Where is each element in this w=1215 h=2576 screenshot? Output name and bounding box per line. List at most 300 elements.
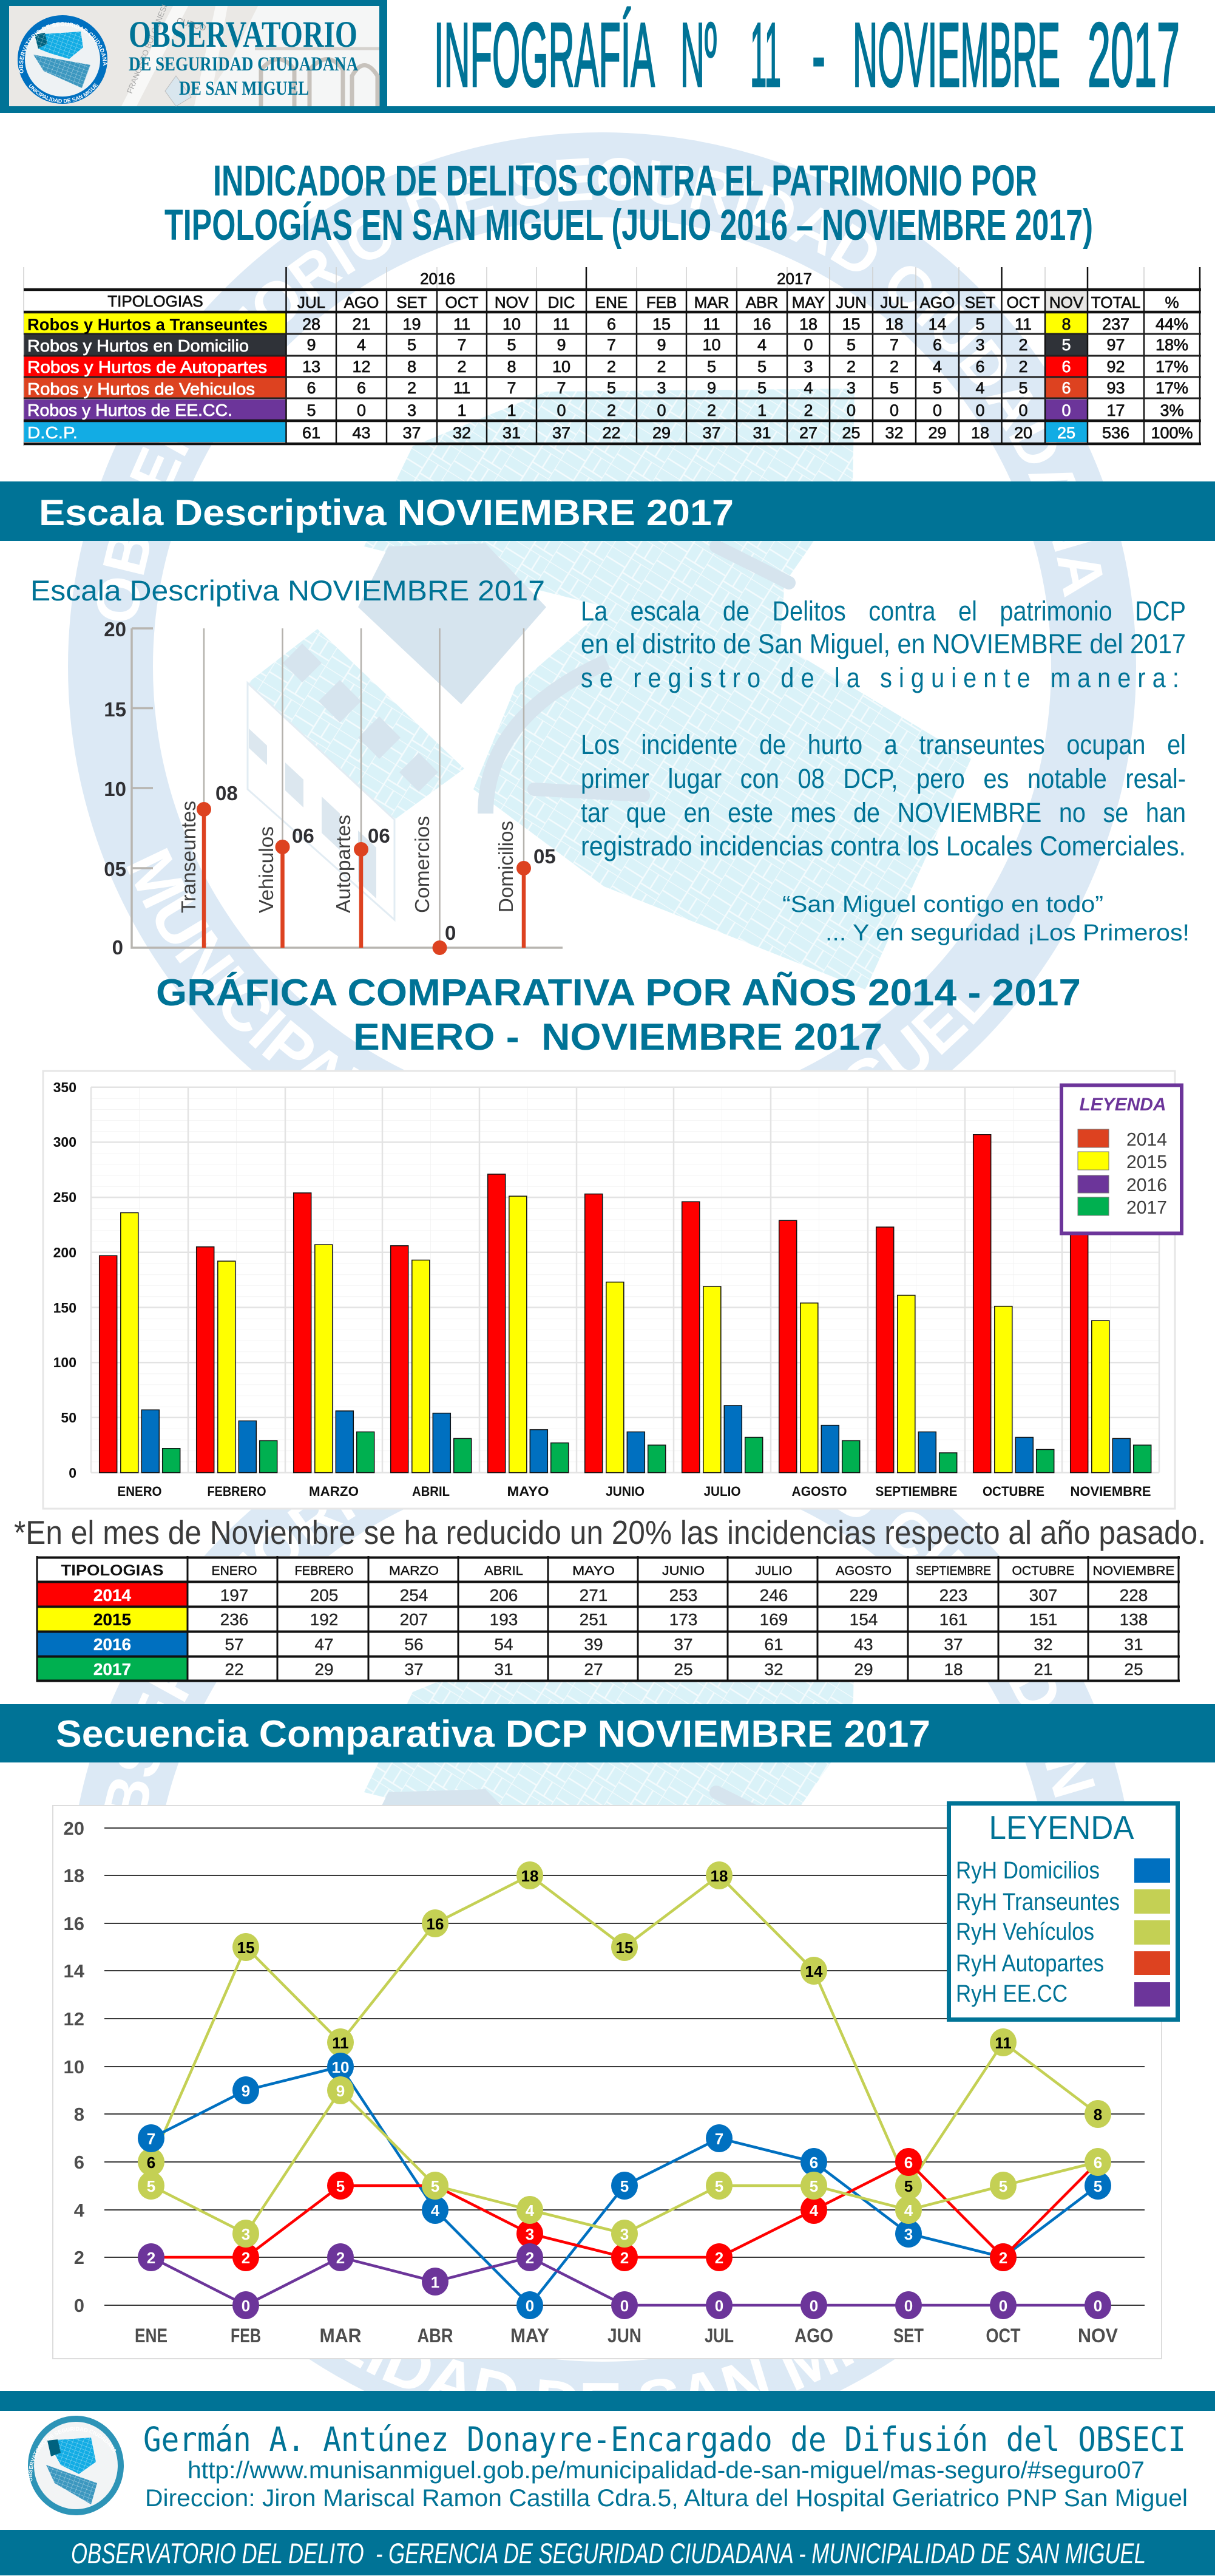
row: transeuntes values: 10 xyxy=(503,315,521,333)
row: domicilio values: 9 xyxy=(557,336,566,354)
column headers: NOVIEMBRE xyxy=(1092,1564,1175,1578)
series: vehiculos xyxy=(138,2076,1111,2248)
row: domicilio values: 3 xyxy=(975,336,985,354)
row 2016: 37 xyxy=(944,1635,963,1654)
bottom bar: credits xyxy=(0,2530,1215,2575)
axis labels: 10 xyxy=(104,778,126,800)
row: d.c.p. totals: 37 xyxy=(402,424,421,442)
row: vehiculos values: 5 xyxy=(1018,379,1028,397)
x axis labels: MAY xyxy=(510,2325,549,2347)
row: d.c.p. totals: 29 xyxy=(652,424,671,442)
section bar: escala descriptiva xyxy=(0,481,1215,541)
heading: grafica comparativa: GRÁFICA COMPARATIVA POR AÑOS 2014 - 2017 xyxy=(156,972,1081,1014)
y axis labels: 0 xyxy=(74,2295,84,2316)
month labels xyxy=(118,1484,1151,1499)
row: autopartes values: 8 xyxy=(407,358,416,376)
legend: series: RyH EE.CC xyxy=(956,1980,1068,2007)
column headers: OCT xyxy=(445,293,479,311)
axis labels: 20 xyxy=(104,618,126,641)
series: domicilios: 5 xyxy=(1094,2177,1102,2195)
x axis labels: OCT xyxy=(986,2325,1021,2347)
month labels: MAYO xyxy=(507,1484,549,1499)
series: ee.cc xyxy=(138,2243,1111,2319)
month labels: JUNIO xyxy=(606,1484,645,1499)
row: domicilio values: 0 xyxy=(804,336,813,354)
x axis labels: ABR xyxy=(418,2325,453,2347)
row: ee.cc values: 0 xyxy=(975,401,985,420)
row: autopartes values: 2 xyxy=(890,358,899,376)
row: transeuntes values: 8 xyxy=(1061,315,1071,333)
column headers: OCTUBRE xyxy=(1012,1564,1074,1578)
watermark: lower seal: OBSERVATORIO DE SEGURIDAD CIUDADANA xyxy=(104,1509,1095,1805)
column headers: AGOSTO xyxy=(836,1564,892,1578)
row 2015: 207 xyxy=(400,1610,428,1629)
series: transeuntes: 14 xyxy=(805,1962,823,1980)
logo wordmark: DE SAN MIGUEL xyxy=(179,78,309,100)
series: domicilios: 5 xyxy=(620,2177,629,2195)
row labels: Robos y Hurtos en Domicilio xyxy=(27,336,249,355)
section bar: secuencia comparativa: Secuencia Comparativa DCP NOVIEMBRE 2017 xyxy=(56,1713,930,1755)
row: d.c.p. totals: 27 xyxy=(799,424,817,442)
series: domicilios: 7 xyxy=(147,2130,155,2148)
row 2016: 43 xyxy=(854,1635,873,1654)
row: transeuntes values: 19 xyxy=(402,315,421,333)
row: ee.cc values: 0 xyxy=(1018,401,1028,420)
row 2016: 54 xyxy=(494,1635,513,1654)
watermark: upper seal: OBSERVATORIO DE SEGURIDAD CIUDADANA xyxy=(97,158,1103,620)
series: ee.cc: 1 xyxy=(431,2273,439,2291)
series: autopartes: 2 xyxy=(242,2249,250,2267)
row 2017: 25 xyxy=(1124,1660,1143,1679)
series: autopartes: 3 xyxy=(526,2225,534,2243)
row: ee.cc values: 17 xyxy=(1106,401,1125,420)
footer xyxy=(0,2391,1215,2575)
row: vehiculos values: 11 xyxy=(453,379,470,397)
row: transeuntes values: 14 xyxy=(928,315,947,333)
row: d.c.p. totals: 31 xyxy=(753,424,771,442)
row: autopartes values: 5 xyxy=(757,358,767,376)
axis labels: 05 xyxy=(104,858,126,880)
section bar: secuencia comparativa xyxy=(0,1704,1215,1762)
row 2015: 192 xyxy=(310,1610,338,1629)
row: domicilio values: 7 xyxy=(457,336,467,354)
y axis labels: 16 xyxy=(64,1913,84,1934)
row: vehiculos values: 5 xyxy=(933,379,942,397)
y axis labels: 14 xyxy=(64,1960,85,1982)
y axis labels: 300 xyxy=(53,1134,76,1150)
watermark: lower seal xyxy=(79,1509,1125,2391)
column headers xyxy=(61,1562,1175,1579)
logo wordmark: DE SEGURIDAD CIUDADANA xyxy=(129,53,358,75)
text: contact: Direccion: Jiron Mariscal Ramon Castilla Cdra.5, Altura del Hospital Geriatrico PNP San Miguel xyxy=(145,2485,1188,2512)
series: ee.cc: 0 xyxy=(242,2297,250,2315)
y axis labels: 200 xyxy=(53,1245,76,1260)
row: ee.cc values: 0 xyxy=(890,401,899,420)
row 2015: 161 xyxy=(939,1610,967,1629)
series: autopartes: 6 xyxy=(904,2153,913,2172)
title: infografia number: 11 xyxy=(750,4,781,106)
bars 2016 xyxy=(141,1405,1130,1473)
column headers: FEB xyxy=(646,293,677,311)
row: vehiculos values: 5 xyxy=(607,379,616,397)
row: vehiculos values: 93 xyxy=(1106,379,1125,397)
column headers: AGO xyxy=(344,293,379,311)
row: domicilio values: 7 xyxy=(607,336,616,354)
row: ee.cc values: 0 xyxy=(357,401,366,420)
row: ee.cc values: 2 xyxy=(707,401,716,420)
row: domicilio values: 18% xyxy=(1156,336,1188,354)
legend: series: RyH Transeuntes xyxy=(956,1889,1120,1915)
x axis labels: JUL xyxy=(705,2325,734,2347)
row: ee.cc values: 3 xyxy=(407,401,416,420)
row: vehiculos values: 4 xyxy=(804,379,813,397)
column headers: SET xyxy=(396,293,427,311)
y axis labels: 100 xyxy=(53,1354,76,1370)
row: vehiculos values: 7 xyxy=(557,379,566,397)
row: autopartes values: 2 xyxy=(607,358,616,376)
row: vehiculos values: 4 xyxy=(975,379,985,397)
row: ee.cc values: 0 xyxy=(847,401,856,420)
series: vehiculos: 4 xyxy=(904,2201,913,2220)
column headers: DIC xyxy=(548,293,575,311)
row: transeuntes values: 11 xyxy=(703,315,720,333)
bars 2017 xyxy=(163,1432,1151,1473)
row 2016: 57 xyxy=(225,1635,244,1654)
column headers: % xyxy=(1165,293,1179,311)
series: vehiculos: 4 xyxy=(526,2201,535,2220)
row 2015: 154 xyxy=(850,1610,878,1629)
row 2016: 32 xyxy=(1034,1635,1053,1654)
row: ee.cc values: 0 xyxy=(1061,401,1071,420)
item: domicilios: Domicilios xyxy=(495,821,517,912)
title: infografia number: - xyxy=(812,4,825,106)
row 2016: 61 xyxy=(764,1635,783,1654)
series: autopartes: 2 xyxy=(999,2249,1007,2267)
series: domicilios: 4 xyxy=(431,2201,440,2220)
series: transeuntes: 16 xyxy=(427,1915,444,1933)
x axis labels: NOV xyxy=(1078,2325,1119,2347)
row labels: Robos y Hurtos de Vehiculos xyxy=(27,379,255,398)
item: domicilios xyxy=(495,821,556,948)
row 2014: 206 xyxy=(490,1586,518,1605)
panel: observatorio logo box xyxy=(0,0,387,107)
series: vehiculos: 5 xyxy=(810,2177,818,2195)
row 2014: 223 xyxy=(939,1586,967,1605)
text block: slogan xyxy=(782,892,1190,946)
x axis labels: AGO xyxy=(794,2325,833,2347)
series: domicilios: 6 xyxy=(810,2153,818,2172)
month labels: OCTUBRE xyxy=(983,1484,1044,1499)
y axis labels: 350 xyxy=(53,1079,76,1095)
series: transeuntes xyxy=(138,1861,1111,2200)
x axis labels xyxy=(135,2325,1119,2347)
chart heading: Escala Descriptiva NOVIEMBRE 2017 xyxy=(30,574,545,607)
month labels: ABRIL xyxy=(412,1484,450,1499)
row: domicilio values: 4 xyxy=(757,336,767,354)
table: tipologias by month 2016-2017 xyxy=(24,267,1201,446)
series: ee.cc: 0 xyxy=(810,2297,818,2315)
row: vehiculos values: 6 xyxy=(1061,379,1071,397)
text block: explanation xyxy=(581,596,1186,861)
row: d.c.p. totals: 25 xyxy=(842,424,861,442)
row: d.c.p. totals: 29 xyxy=(928,424,947,442)
row: autopartes values: 12 xyxy=(352,358,371,376)
row: domicilio values: 9 xyxy=(657,336,666,354)
row: domicilio values: 5 xyxy=(407,336,416,354)
row: transeuntes values: 237 xyxy=(1102,315,1129,333)
row: autopartes values: 2 xyxy=(457,358,467,376)
row: autopartes values: 2 xyxy=(657,358,666,376)
series: domicilios: 10 xyxy=(332,2058,349,2076)
column headers: NOV xyxy=(1049,293,1084,311)
row: autopartes values: 6 xyxy=(975,358,985,376)
row 2017: 21 xyxy=(1034,1660,1053,1679)
month labels: AGOSTO xyxy=(791,1484,847,1499)
row: domicilio values: 97 xyxy=(1106,336,1125,354)
series: vehiculos: 3 xyxy=(620,2225,629,2243)
row: autopartes values: 5 xyxy=(707,358,716,376)
y axis labels xyxy=(53,1079,76,1481)
month labels: NOVIEMBRE xyxy=(1071,1484,1151,1499)
row 2015: 151 xyxy=(1029,1610,1057,1629)
text: contact xyxy=(143,2420,1188,2512)
row: ee.cc values: 2 xyxy=(804,401,813,420)
row 2017: 27 xyxy=(584,1660,603,1679)
legend: series: RyH Autopartes xyxy=(956,1950,1104,1977)
row: transeuntes values: 18 xyxy=(799,315,817,333)
row 2015: 236 xyxy=(220,1610,248,1629)
row: d.c.p. totals: 32 xyxy=(453,424,471,442)
y axis labels: 150 xyxy=(53,1300,76,1316)
item: comercios xyxy=(411,816,456,955)
row: domicilio values: 10 xyxy=(702,336,721,354)
x axis labels: JUN xyxy=(608,2325,641,2347)
row: transeuntes values: 44% xyxy=(1156,315,1188,333)
item: transeuntes: Transeuntes xyxy=(177,801,200,913)
y axis labels: 250 xyxy=(53,1189,76,1205)
item: comercios: 0 xyxy=(445,922,456,944)
series: vehiculos: 3 xyxy=(242,2225,250,2243)
column headers: JUL xyxy=(297,293,325,311)
table: yearly comparison xyxy=(36,1556,1180,1682)
year labels xyxy=(420,270,812,288)
axes and stems xyxy=(132,628,563,948)
column headers: JUNIO xyxy=(662,1564,705,1578)
row 2014: 246 xyxy=(760,1586,788,1605)
row: autopartes values: 2 xyxy=(1018,358,1028,376)
row 2014: 253 xyxy=(669,1586,697,1605)
row 2015: 138 xyxy=(1120,1610,1148,1629)
series: transeuntes: 18 xyxy=(521,1867,538,1885)
series: transeuntes: 11 xyxy=(332,2034,349,2052)
y axis labels: 20 xyxy=(64,1818,84,1839)
row: d.c.p. totals: 22 xyxy=(602,424,621,442)
series: ee.cc: 0 xyxy=(999,2297,1007,2315)
row: domicilio values: 7 xyxy=(890,336,899,354)
item: comercios: Comercios xyxy=(411,816,433,913)
series: autopartes: 4 xyxy=(810,2201,819,2220)
y axis labels: 10 xyxy=(64,2056,84,2078)
x axis labels: SET xyxy=(893,2325,924,2347)
row: ee.cc values: 1 xyxy=(457,401,467,420)
series: domicilios xyxy=(138,2053,1111,2319)
row 2014: 254 xyxy=(400,1586,428,1605)
series: domicilios: 7 xyxy=(715,2130,723,2148)
row: ee.cc values: 0 xyxy=(657,401,666,420)
row: transeuntes values: 5 xyxy=(975,315,985,333)
row: domicilio values: 5 xyxy=(507,336,516,354)
series: autopartes: 5 xyxy=(336,2177,345,2195)
row: vehiculos values: 5 xyxy=(757,379,767,397)
series: transeuntes: 5 xyxy=(904,2177,913,2195)
row 2015: 169 xyxy=(760,1610,788,1629)
category colour cells xyxy=(24,313,1087,442)
row: vehiculos values: 17% xyxy=(1156,379,1188,397)
row: vehiculos values: 3 xyxy=(847,379,856,397)
row labels: D.C.P. xyxy=(27,423,78,442)
icon: seal logo: OBSERVATORIO DE SEGURIDAD CIUDADANA xyxy=(19,22,107,73)
header band xyxy=(0,0,1215,113)
row 2016: 39 xyxy=(584,1635,603,1654)
row: ee.cc values: 1 xyxy=(757,401,767,420)
series: ee.cc: 0 xyxy=(620,2297,629,2315)
row: d.c.p. totals: 61 xyxy=(302,424,320,442)
text: contact: http://www.munisanmiguel.gob.pe/municipalidad-de-san-miguel/mas-seguro/#seguro07 xyxy=(188,2457,1145,2484)
lollipop chart: escala descriptiva xyxy=(104,618,563,959)
x axis labels: ENE xyxy=(135,2325,168,2347)
month labels: JULIO xyxy=(704,1484,740,1499)
row 2014: 205 xyxy=(310,1586,338,1605)
row 2014: 229 xyxy=(850,1586,878,1605)
y axis labels: 2 xyxy=(74,2247,84,2268)
section bar: escala descriptiva: Escala Descriptiva NOVIEMBRE 2017 xyxy=(39,492,734,533)
series: autopartes: 2 xyxy=(715,2249,723,2267)
row labels: Robos y Hurtos a Transeuntes xyxy=(27,315,268,334)
row: domicilio values: 6 xyxy=(933,336,942,354)
series: transeuntes: 15 xyxy=(616,1939,633,1957)
year labels: 2016 xyxy=(420,270,455,288)
row: d.c.p. totals: 32 xyxy=(885,424,904,442)
panel: line chart xyxy=(53,1803,1177,2359)
row 2017: 2017 xyxy=(93,1660,131,1679)
series: autopartes: 2 xyxy=(620,2249,629,2267)
y axis labels: 6 xyxy=(74,2152,84,2173)
row 2015: 193 xyxy=(490,1610,518,1629)
series: vehiculos: 9 xyxy=(336,2082,345,2100)
item: domicilios: 05 xyxy=(533,845,556,868)
row: transeuntes values: 21 xyxy=(352,315,371,333)
row labels: Robos y Hurtos de Autopartes xyxy=(27,358,267,376)
row: domicilio values: 4 xyxy=(357,336,366,354)
row: ee.cc values: 0 xyxy=(933,401,942,420)
column headers: TOTAL xyxy=(1091,293,1140,311)
column headers: ABRIL xyxy=(484,1564,523,1578)
panel: observatorio logo box: CUZCO xyxy=(175,15,208,33)
row 2016: 37 xyxy=(674,1635,693,1654)
legend: years: 2015 xyxy=(1126,1151,1167,1172)
series: transeuntes: 8 xyxy=(1094,2105,1102,2124)
series: autopartes xyxy=(151,2148,1098,2271)
row 2014: 228 xyxy=(1120,1586,1148,1605)
row: autopartes values: 4 xyxy=(933,358,942,376)
row 2017: 29 xyxy=(314,1660,334,1679)
row: autopartes values: 2 xyxy=(847,358,856,376)
row 2017: 29 xyxy=(854,1660,873,1679)
row: domicilio values: 5 xyxy=(847,336,856,354)
row: transeuntes values: 11 xyxy=(553,315,570,333)
row: autopartes values: 6 xyxy=(1061,358,1071,376)
column headers: TIPOLOGIAS xyxy=(107,292,203,310)
series: ee.cc: 0 xyxy=(1094,2297,1102,2315)
item: vehiculos xyxy=(255,824,314,948)
row 2017: 31 xyxy=(494,1660,513,1679)
column headers: TIPOLOGIAS xyxy=(61,1562,164,1579)
row: autopartes values: 3 xyxy=(804,358,813,376)
month labels: MARZO xyxy=(309,1484,359,1499)
series: ee.cc: 2 xyxy=(336,2249,345,2267)
month labels: ENERO xyxy=(118,1484,161,1499)
row: d.c.p. totals: 536 xyxy=(1102,424,1129,442)
watermark: lower seal: MUNICIPALIDAD DE SAN MIGUEL xyxy=(345,2359,855,2391)
month labels: FEBRERO xyxy=(208,1484,266,1499)
bars 2015 xyxy=(121,1196,1109,1473)
row: domicilio values: 2 xyxy=(1018,336,1028,354)
series: vehiculos: 6 xyxy=(1094,2153,1102,2172)
logo wordmark: OBSERVATORIO xyxy=(129,15,357,55)
series: ee.cc: 0 xyxy=(904,2297,913,2315)
row: vehiculos values: 6 xyxy=(357,379,366,397)
x axis labels: MAR xyxy=(319,2325,362,2347)
axis labels: 0 xyxy=(112,936,123,959)
row: transeuntes values: 15 xyxy=(842,315,861,333)
row 2015: 251 xyxy=(580,1610,608,1629)
row 2015: 2015 xyxy=(93,1610,131,1629)
title: infografia number: INFOGRAFÍA xyxy=(434,4,655,106)
heading: indicador de delitos xyxy=(164,157,1093,250)
icon: footer seal xyxy=(28,2416,124,2515)
y axis labels: 8 xyxy=(74,2104,84,2125)
text block: slogan: ... Y en seguridad ¡Los Primeros! xyxy=(825,920,1190,946)
row: ee.cc values: 0 xyxy=(557,401,566,420)
row: domicilio values: 5 xyxy=(1061,336,1071,354)
y axis labels: 18 xyxy=(64,1865,84,1886)
item: autopartes xyxy=(332,815,390,948)
row: d.c.p. totals: 37 xyxy=(702,424,721,442)
year cells xyxy=(38,1583,188,1680)
row: transeuntes values: 16 xyxy=(753,315,771,333)
column headers: ENERO xyxy=(211,1564,257,1578)
column headers: OCT xyxy=(1007,293,1040,311)
series: ee.cc: 2 xyxy=(526,2249,534,2267)
row 2017: 22 xyxy=(225,1660,244,1679)
item: autopartes: Autopartes xyxy=(332,815,354,913)
row 2016: 2016 xyxy=(93,1635,131,1654)
row: d.c.p. totals: 100% xyxy=(1151,424,1193,442)
year labels: 2017 xyxy=(777,270,812,288)
heading: grafica comparativa xyxy=(156,972,1081,1058)
panel: observatorio logo box: FRANCISCO BOLOGNESI xyxy=(125,3,169,95)
row 2016: 31 xyxy=(1124,1635,1143,1654)
month labels: SEPTIEMBRE xyxy=(875,1484,958,1499)
y axis labels: 12 xyxy=(64,2008,84,2030)
row labels xyxy=(27,315,268,442)
row labels: Robos y Hurtos de EE.CC. xyxy=(27,401,232,420)
column headers: NOV xyxy=(495,293,529,311)
column headers: SET xyxy=(965,293,995,311)
watermark: upper seal xyxy=(68,132,1136,1070)
item: vehiculos: Vehiculos xyxy=(255,826,277,913)
row: autopartes values: 17% xyxy=(1156,358,1188,376)
